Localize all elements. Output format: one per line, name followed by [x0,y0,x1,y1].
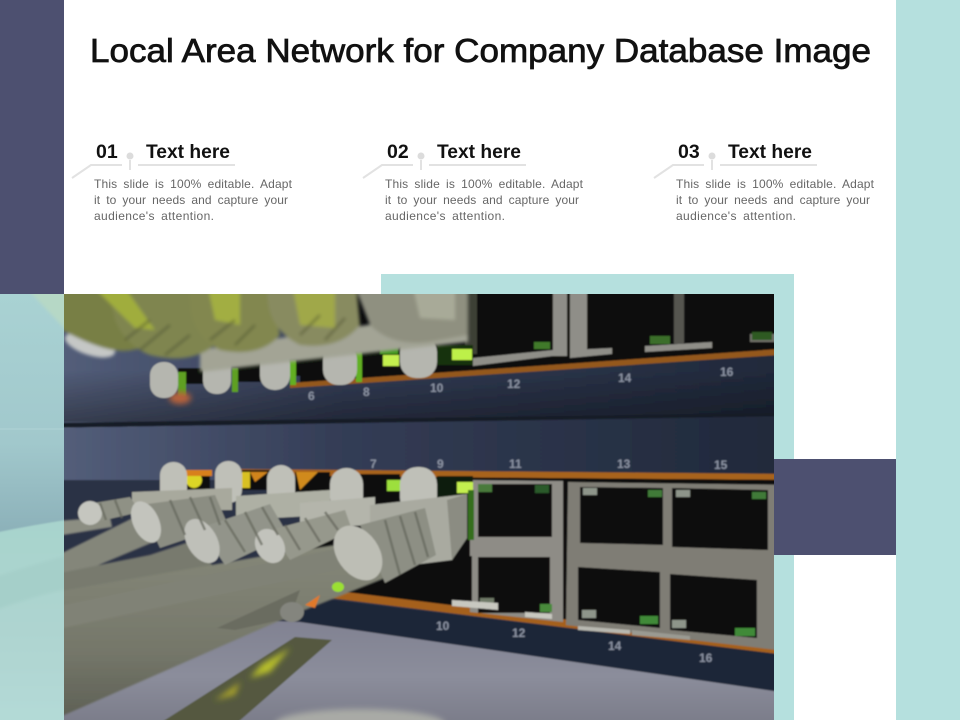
yellow light strip [164,636,332,720]
number 01: 01 [96,141,118,163]
connector 01 [72,152,235,178]
printed port numbers [308,365,734,665]
lower orange stripe [330,590,794,656]
body 01: it to your needs and capture your [94,193,288,207]
middle orange stripe [240,469,794,480]
printed port numbers: 13 [617,457,631,471]
item 01 [72,141,293,223]
lower green LED [305,582,344,608]
item 02 [363,141,584,223]
upper row green and amber LED glow [169,342,473,404]
upper row plug clips [150,336,437,398]
photo: network switch with cables [44,274,794,720]
connector 02 [363,152,526,178]
lower row plug housings [132,488,467,564]
printed port numbers: 6 [308,389,315,403]
lower cable boots [75,495,436,630]
body 01: This slide is 100% editable. Adapt [94,177,293,191]
body 01: audience's attention. [94,209,214,223]
body 03: audience's attention. [676,209,796,223]
printed port numbers: 11 [509,457,522,471]
printed port numbers: 7 [370,457,377,471]
upper silver port frames [464,294,774,368]
lower port tabs and LEDs [452,484,766,640]
lower silver port frames [440,480,794,652]
number 03: 03 [678,141,700,163]
heading 01: Text here [146,141,230,163]
body 02: audience's attention. [385,209,505,223]
switch gap [64,416,614,429]
left tinted photo strip [0,294,64,720]
upper row cable boots [64,294,470,375]
printed port numbers: 16 [720,365,734,379]
heading 02: Text here [437,141,521,163]
left navy strip [0,0,64,294]
body 03 [676,177,875,223]
heading 03: Text here [728,141,812,163]
switch upper unit [64,327,774,424]
printed port numbers: 9 [437,457,444,471]
body 02: This slide is 100% editable. Adapt [385,177,584,191]
body 03: it to your needs and capture your [676,193,870,207]
switch lower unit [44,416,794,480]
lower row LEDs [180,470,474,540]
printed port numbers: 10 [430,381,444,395]
title: Local Area Network for Company Database Image [90,33,871,70]
bottom grey shelf [64,620,774,720]
right teal strip [896,0,960,720]
printed port numbers: 12 [507,377,521,391]
upper port LEDs [534,332,772,349]
connector 03 [654,152,817,178]
printed port numbers: 14 [618,371,632,385]
printed port numbers: 15 [714,458,728,472]
printed port numbers: 12 [512,626,526,640]
printed port numbers: 8 [363,385,370,399]
body 01 [94,177,293,223]
upper orange stripe [290,348,794,388]
teal backing panel [381,274,794,720]
upper port band [300,294,774,384]
item 03 [654,141,875,223]
lower port band [315,476,774,620]
number 02: 02 [387,141,409,163]
body 03: This slide is 100% editable. Adapt [676,177,875,191]
printed port numbers: 14 [608,639,622,653]
lower label band [300,600,774,692]
body 02: it to your needs and capture your [385,193,579,207]
dark accent block [774,459,896,555]
lower left cables [64,518,384,716]
lower row plug clips [158,460,438,504]
body 02 [385,177,584,223]
printed port numbers: 16 [699,651,713,665]
printed port numbers: 10 [436,619,450,633]
